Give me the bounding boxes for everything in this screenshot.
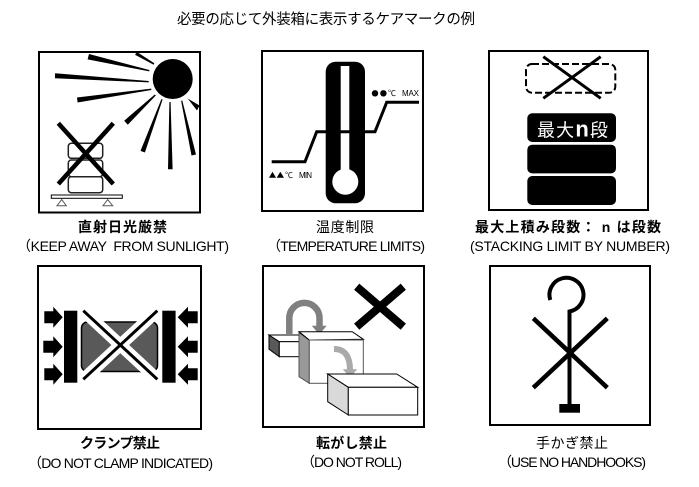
- icon: stacked boxes crossed out: [58, 123, 113, 193]
- panel frame: [39, 52, 200, 212]
- arrow: first roll: [289, 303, 327, 335]
- panel frame: [490, 266, 650, 425]
- panel frame: [263, 266, 424, 427]
- icon: stacked black boxes: [527, 113, 616, 205]
- icon: clamp plates: [64, 311, 176, 383]
- icon: crossed out box: [82, 311, 158, 379]
- panel: use no handhooks: [490, 266, 650, 470]
- icon: large box: [328, 374, 418, 415]
- icon: left arrows: [43, 307, 63, 385]
- icon: hook: [549, 278, 583, 413]
- icon: balance platform: [51, 195, 122, 206]
- label: Japanese: 最大上積み段数： n は段数: [475, 219, 661, 235]
- label: Japanese: 直射日光厳禁: [78, 219, 167, 235]
- icon: sun with rays: [55, 52, 200, 169]
- label: English: （KEEP AWAY FROM SUNLIGHT): [17, 238, 229, 254]
- label: Japanese: 手かぎ禁止: [536, 435, 608, 451]
- icon: large cross: [357, 287, 403, 327]
- label: minimum temperature: MIN: [299, 171, 312, 180]
- icon: crossed out dashed box: [526, 57, 615, 98]
- icon: small box: [269, 335, 310, 357]
- label: Japanese: 転がし禁止: [316, 435, 387, 451]
- panel: keep away from sunlight: [17, 52, 229, 254]
- label: minimum temperature: [269, 171, 312, 180]
- title: 必要の応じて外装箱に表示するケアマークの例: [177, 11, 475, 28]
- arrow: second roll: [334, 349, 357, 378]
- box label: 最大n段: [537, 116, 608, 142]
- panel frame: [489, 51, 648, 210]
- label: English: （TEMPERATURE LIMITS): [267, 238, 425, 254]
- chart: temperature line: [272, 102, 419, 162]
- label: maximum temperature: MAX: [402, 89, 420, 98]
- label: maximum temperature: ℃: [388, 89, 396, 98]
- label: English: （DO NOT ROLL): [301, 454, 402, 470]
- panel frame: [38, 266, 201, 429]
- label: English: （DO NOT CLAMP INDICATED): [28, 455, 213, 471]
- label: English: (STACKING LIMIT BY NUMBER): [470, 238, 670, 254]
- label: Japanese: 温度制限: [316, 219, 374, 235]
- icon: medium box: [299, 332, 363, 383]
- label: Japanese: クランプ禁止: [80, 435, 160, 451]
- panel: do not clamp: [28, 266, 213, 471]
- label: minimum temperature: ℃: [285, 171, 293, 180]
- panel: do not roll: [263, 266, 424, 470]
- label: English: （USE NO HANDHOOKS): [498, 454, 646, 470]
- panel: temperature limits: [262, 51, 425, 254]
- icon: thermometer: [326, 62, 365, 203]
- panel: stacking limit: [470, 51, 670, 254]
- label: maximum temperature: [372, 89, 420, 98]
- panel frame: [262, 51, 423, 211]
- icon: right arrows: [178, 307, 198, 385]
- icon: large cross: [533, 318, 607, 388]
